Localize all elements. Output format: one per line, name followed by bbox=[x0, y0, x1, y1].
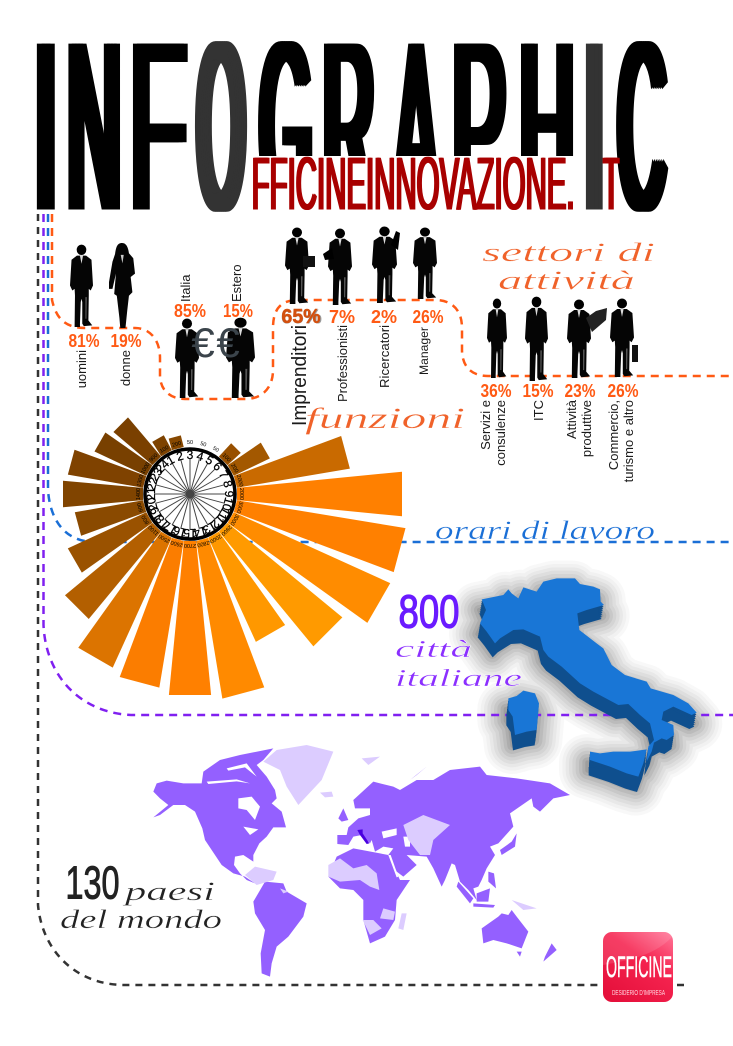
chart: radial working hours: 2500 bbox=[158, 533, 171, 544]
logo: Officine bbox=[603, 932, 673, 1002]
title: INFOGRAPHIC: N bbox=[62, 0, 116, 262]
chart: radial working hours: 1100 bbox=[148, 524, 160, 536]
chart: radial working hours: 21 bbox=[144, 487, 158, 501]
chart: radial working hours: 2700 bbox=[184, 542, 196, 548]
chart: radial working hours: 50 bbox=[211, 446, 220, 454]
label: città italiane bbox=[395, 637, 523, 692]
chart: radial working hours: 50 bbox=[199, 441, 207, 448]
logo: Officine: DESIDERIO D'IMPRESA bbox=[612, 988, 665, 997]
group: gender: donne bbox=[118, 350, 133, 386]
chart: radial working hours bbox=[63, 417, 406, 699]
chart: radial working hours: 1400 bbox=[136, 488, 142, 500]
chart: radial working hours: 200 bbox=[229, 463, 239, 474]
chart: radial working hours: 11 bbox=[214, 505, 233, 523]
chart: radial working hours: 3000 bbox=[235, 501, 244, 514]
title: INFOGRAPHIC bbox=[28, 0, 668, 262]
dashed line: black bbox=[38, 214, 686, 985]
dashed line: orange bbox=[52, 214, 733, 399]
chart: radial working hours: 9 bbox=[222, 491, 236, 498]
chart: radial working hours: 17 bbox=[161, 518, 180, 537]
title: INFOGRAPHIC: P bbox=[447, 0, 501, 262]
group: funzioni: Ricercatori bbox=[377, 325, 392, 388]
chart: radial working hours: 1300 bbox=[136, 474, 145, 487]
chart: radial working hours: 1000 bbox=[140, 462, 151, 475]
chart: radial working hours: 24 bbox=[153, 457, 172, 476]
group: funzioni: Manager bbox=[417, 327, 431, 375]
group: Italia / Estero: € bbox=[191, 319, 215, 366]
chart: radial working hours: 800 bbox=[141, 514, 151, 525]
chart: radial working hours: 20 bbox=[144, 496, 161, 512]
group: settori: consulenze bbox=[493, 400, 508, 466]
group: settori: Commercio, bbox=[606, 400, 621, 470]
group: gender: 81% bbox=[68, 331, 100, 351]
group: Italia / Estero bbox=[174, 264, 255, 398]
subtitle: officineinnovazione.it: FFICINEINNOVAZIONE. bbox=[251, 141, 573, 226]
stat: 800: 800 bbox=[398, 586, 460, 638]
group: funzioni: 7% bbox=[329, 307, 355, 327]
group: settori: produttive bbox=[579, 400, 594, 457]
chart: radial working hours: 100 bbox=[221, 453, 231, 463]
subtitle: officineinnovazione.it: T bbox=[602, 141, 617, 226]
group: funzioni: Professionisti bbox=[335, 325, 350, 402]
group: funzioni: 26% bbox=[412, 307, 444, 327]
dashed line: blue bbox=[48, 214, 733, 542]
label: paesi del mondo: del mondo bbox=[60, 905, 222, 934]
group: funzioni: 65% bbox=[281, 306, 322, 328]
group: Italia / Estero: Estero bbox=[229, 264, 244, 302]
chart: radial working hours: 15 bbox=[183, 526, 197, 540]
group: Italia / Estero: € bbox=[216, 319, 240, 366]
chart: radial working hours: 2000 bbox=[209, 533, 222, 544]
group: Italia / Estero: Italia bbox=[178, 274, 193, 302]
group: funzioni: 2% bbox=[371, 307, 397, 327]
shadow: Italy bbox=[477, 589, 694, 787]
chart: radial working hours: 13 bbox=[200, 518, 219, 537]
title: INFOGRAPHIC: R bbox=[318, 0, 369, 262]
label: città italiane: città bbox=[395, 637, 472, 663]
heading: funzioni: funzioni bbox=[305, 402, 465, 435]
group: Italia / Estero: 15% bbox=[223, 301, 253, 321]
chart: radial working hours: 3 bbox=[187, 448, 194, 462]
chart: radial working hours: 100 bbox=[159, 445, 170, 455]
group: funzioni: Imprenditori bbox=[288, 325, 311, 426]
chart: radial working hours: 200 bbox=[172, 441, 182, 449]
group: Italia / Estero: 85% bbox=[174, 301, 206, 321]
chart: radial working hours: 19 bbox=[147, 504, 166, 523]
title: INFOGRAPHIC: O bbox=[192, 0, 239, 262]
group: settori: Attività bbox=[564, 399, 579, 439]
chart: radial working hours: 2800 bbox=[197, 539, 210, 548]
chart: radial working hours: 2000 bbox=[238, 488, 244, 500]
chart: radial working hours: 4 bbox=[195, 449, 205, 464]
chart: radial working hours: 14 bbox=[192, 523, 208, 540]
group: settori: 23% bbox=[564, 381, 596, 401]
heading: settori di attività: settori di bbox=[482, 238, 655, 267]
group: settori: turismo e altro bbox=[621, 400, 636, 482]
map: Italy 3D bbox=[478, 578, 697, 792]
title: INFOGRAPHIC: C bbox=[613, 0, 660, 262]
chart: radial working hours: 16 bbox=[171, 523, 188, 540]
group: settori: 15% bbox=[522, 381, 554, 401]
group: gender: 19% bbox=[110, 331, 142, 351]
title: INFOGRAPHIC: F bbox=[125, 0, 184, 262]
group: funzioni: 65% bbox=[282, 306, 321, 328]
label: paesi del mondo: paesi bbox=[122, 877, 215, 906]
chart: radial working hours: 900 bbox=[149, 453, 159, 463]
chart: radial working hours: 2800 bbox=[220, 524, 233, 537]
chart: radial working hours: 1 bbox=[164, 452, 177, 468]
chart: radial working hours: 8 bbox=[220, 479, 235, 489]
chart: radial working hours: 2600 bbox=[170, 539, 183, 548]
logo: Officine: OFFICINE bbox=[606, 952, 672, 985]
group: funzioni bbox=[281, 227, 444, 426]
group: settori bbox=[478, 297, 638, 482]
heading: settori di attività bbox=[482, 238, 655, 295]
title: INFOGRAPHIC: A bbox=[390, 0, 433, 262]
chart: radial working hours: 10 bbox=[219, 496, 236, 513]
chart: radial working hours: 12 bbox=[208, 512, 227, 531]
map: world bbox=[153, 745, 570, 977]
chart: radial working hours: 6 bbox=[210, 459, 225, 474]
chart: radial working hours: 2 bbox=[175, 449, 185, 464]
title: INFOGRAPHIC: I bbox=[578, 0, 603, 262]
chart: radial working hours: 5 bbox=[203, 452, 216, 468]
label: città italiane: italiane bbox=[395, 666, 523, 692]
chart: radial working hours: 23 bbox=[147, 465, 166, 484]
title: INFOGRAPHIC: G bbox=[255, 0, 307, 262]
chart: radial working hours: 22 bbox=[144, 475, 161, 492]
group: gender: uomini bbox=[74, 350, 89, 388]
title: INFOGRAPHIC: I bbox=[28, 0, 55, 262]
group: settori: 26% bbox=[608, 381, 638, 401]
group: settori: ITC bbox=[531, 400, 546, 421]
group: settori: Servizi e bbox=[478, 400, 493, 450]
chart: radial working hours: 3000 bbox=[229, 513, 240, 526]
dashed line: purple bbox=[44, 214, 733, 715]
label: paesi del mondo bbox=[60, 877, 222, 934]
chart: radial working hours: 7 bbox=[216, 468, 232, 481]
chart: radial working hours: 50 bbox=[187, 440, 193, 446]
chart: radial working hours: 2000 bbox=[235, 474, 244, 487]
stat: 130: 130 bbox=[66, 856, 120, 908]
heading: orari di lavoro: orari di lavoro bbox=[435, 516, 655, 545]
group: gender bbox=[68, 243, 142, 388]
chart: radial working hours: 600 bbox=[137, 502, 145, 512]
chart: radial working hours: 18 bbox=[153, 512, 172, 531]
heading: settori di attività: attività bbox=[498, 266, 635, 295]
title: INFOGRAPHIC: H bbox=[515, 0, 569, 262]
group: settori: 36% bbox=[480, 381, 512, 401]
